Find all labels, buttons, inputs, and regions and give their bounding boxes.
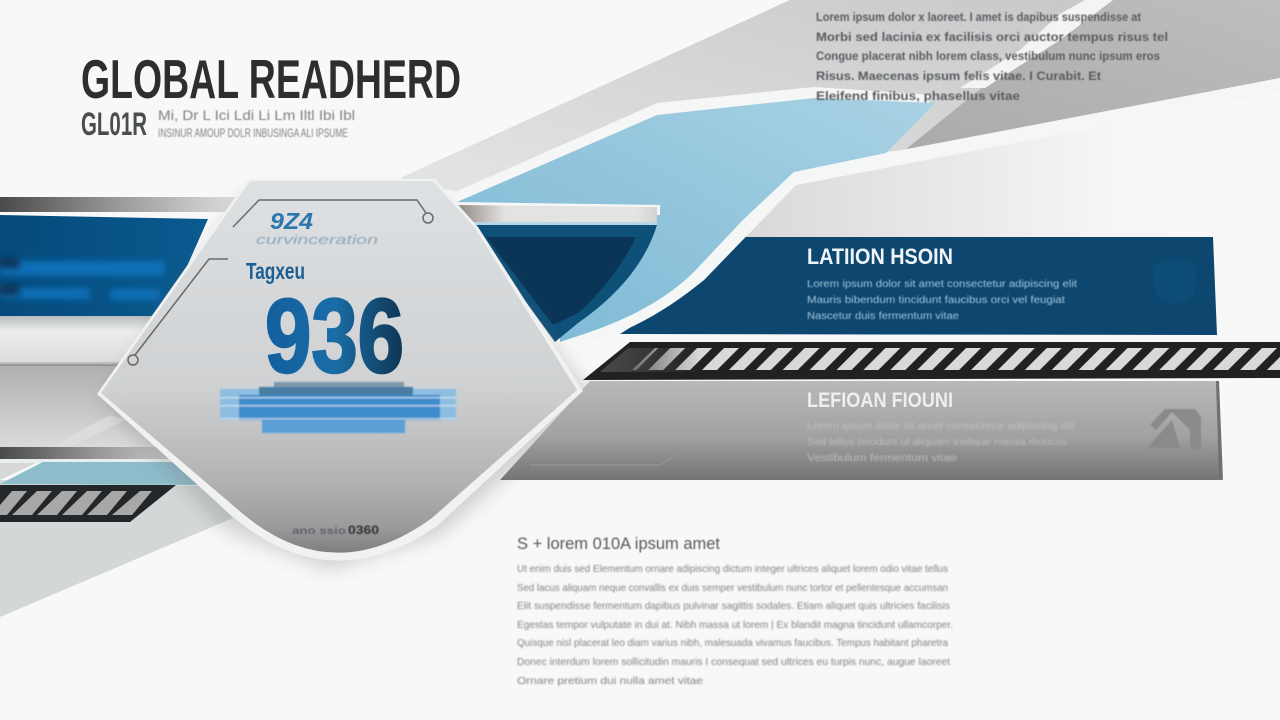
inset line — [530, 450, 683, 465]
bottom body text: Donec interdum lorem sollicitudin mauris I consequat sed ultrices eu turpis nunc, augue laoreet — [517, 656, 950, 668]
label: Tagxeu — [246, 258, 305, 284]
hazard stripe bar — [583, 342, 1280, 380]
panel body text — [807, 421, 1075, 464]
background shape: top light grey band — [400, 0, 1120, 195]
icon: house arrow — [1147, 409, 1201, 449]
text block: top right: Lorem ipsum dolor x laoreet. I amet is dapibus suspendisse at — [816, 12, 1141, 24]
panel shadow edge — [1216, 381, 1223, 480]
bar left fade — [600, 348, 700, 372]
bottom heading: S + lorem 010A ipsum amet — [517, 534, 720, 553]
subtitle lines: INSINUR AMOUP DOLR INBUSINGA ALI IPSUME — [158, 126, 348, 140]
right of badge: metallic bar — [455, 205, 657, 225]
decorative white streak top right — [960, 0, 1113, 88]
panel body text: Lorem ipsum dolor sit amet consectetur adipiscing elit — [807, 421, 1075, 432]
background shape: right lower soft wedge — [745, 92, 1280, 240]
bottom body text — [517, 563, 953, 687]
left band: pale blue strip — [0, 459, 215, 485]
title: GLOBAL READHERD — [81, 48, 461, 110]
left band: grey panel — [0, 366, 220, 448]
connector line top — [233, 200, 433, 227]
panel body text: Nascetur duis fermentum vitae — [807, 311, 959, 322]
panel body text: Sed tellus tincidunt ut aliquam tristique massa rhoncus — [807, 437, 1067, 448]
badge shadow — [100, 195, 595, 570]
text block: top right: Risus. Maecenas ipsum felis vitae. I Curabit. Et — [816, 71, 1101, 83]
left band: blue banner — [0, 215, 208, 316]
connector line left — [128, 259, 228, 365]
title — [81, 48, 461, 142]
subtitle mark: GL01R — [81, 106, 147, 142]
panel: blue — [575, 172, 1217, 345]
banner streaks — [0, 258, 165, 300]
bottom body text: Ornare pretium dui nulla amet vitae — [517, 675, 703, 687]
bottom caption: ano ssio — [292, 526, 346, 537]
panel body text — [807, 279, 1077, 322]
bar stripes — [632, 348, 1280, 370]
background shape: bottom-left grey wedge — [0, 480, 233, 617]
text block: top right — [816, 12, 1168, 103]
badge — [97, 179, 583, 561]
bottom caption — [292, 523, 379, 537]
text block: top right: Eleifend finibus, phasellus vitae — [816, 91, 1020, 103]
light blue ribbon — [457, 98, 935, 342]
left band: dark metallic strip — [0, 447, 200, 459]
white swoosh edge — [575, 172, 796, 345]
left band: pale strip — [0, 316, 200, 366]
white swoosh under the blue shape — [453, 78, 1280, 345]
icon: blue panel emblem — [1152, 260, 1198, 304]
panel heading: LEFIOAN FIOUNI — [807, 389, 953, 412]
bottom body text: Egestas tempor vulputate in dui at. Nibh massa ut lorem | Ex blandit magna tincidunt ullamcorper. — [517, 619, 953, 631]
panel body text: Mauris bibendum tincidunt faucibus orci vel feugiat — [807, 295, 1065, 306]
panel heading: LATIION HSOIN — [807, 244, 953, 269]
left band: metallic stripe — [0, 197, 235, 212]
bottom body text: Sed lacus aliquam neque convallis ex duis semper vestibulum nunc tortor et pellentesque accumsan — [517, 582, 948, 594]
text block: bottom — [517, 534, 953, 687]
small caption: curvinceration — [256, 232, 378, 247]
bottom body text: Ut enim duis sed Elementum ornare adipiscing dictum integer ultrices aliquet lorem odio vitae tellus — [517, 563, 948, 575]
stacked blue bars — [220, 382, 456, 433]
bottom body text: Quisque nisl placerat leo diam varius nibh, malesuada vivamus faucibus. Tempus habitant pharetra — [517, 637, 948, 649]
text block: top right: Morbi sed lacinia ex facilisis orci auctor tempus risus tel — [816, 32, 1168, 44]
subtitle lines: Mi, Dr L Ici Ldi Li Lm Iltl Ibi Ibl — [158, 107, 355, 123]
subtitle lines — [158, 107, 355, 140]
badge rim — [97, 179, 583, 561]
big number: 936 — [265, 278, 404, 395]
small figure: 9Z4 — [270, 208, 313, 234]
left hazard stripe bar — [0, 485, 176, 522]
panel body text: Vestibulum fermentum vitae — [807, 453, 958, 464]
panel body text: Lorem ipsum dolor sit amet consectetur adipiscing elit — [807, 279, 1077, 290]
text block: top right: Congue placerat nibh lorem class, vestibulum nunc ipsum eros — [816, 51, 1160, 63]
panel: grey — [500, 381, 1223, 480]
hazard stripes — [0, 491, 152, 515]
bottom body text: Elit suspendisse fermentum dapibus pulvinar sagittis sodales. Etiam aliquet quis ultricies facilisis — [517, 600, 950, 612]
badge face — [101, 181, 577, 553]
bottom caption: 0360 — [348, 523, 379, 537]
background shape: top-right darker band — [795, 0, 1280, 172]
right of badge: dark blue funnel — [470, 225, 657, 342]
